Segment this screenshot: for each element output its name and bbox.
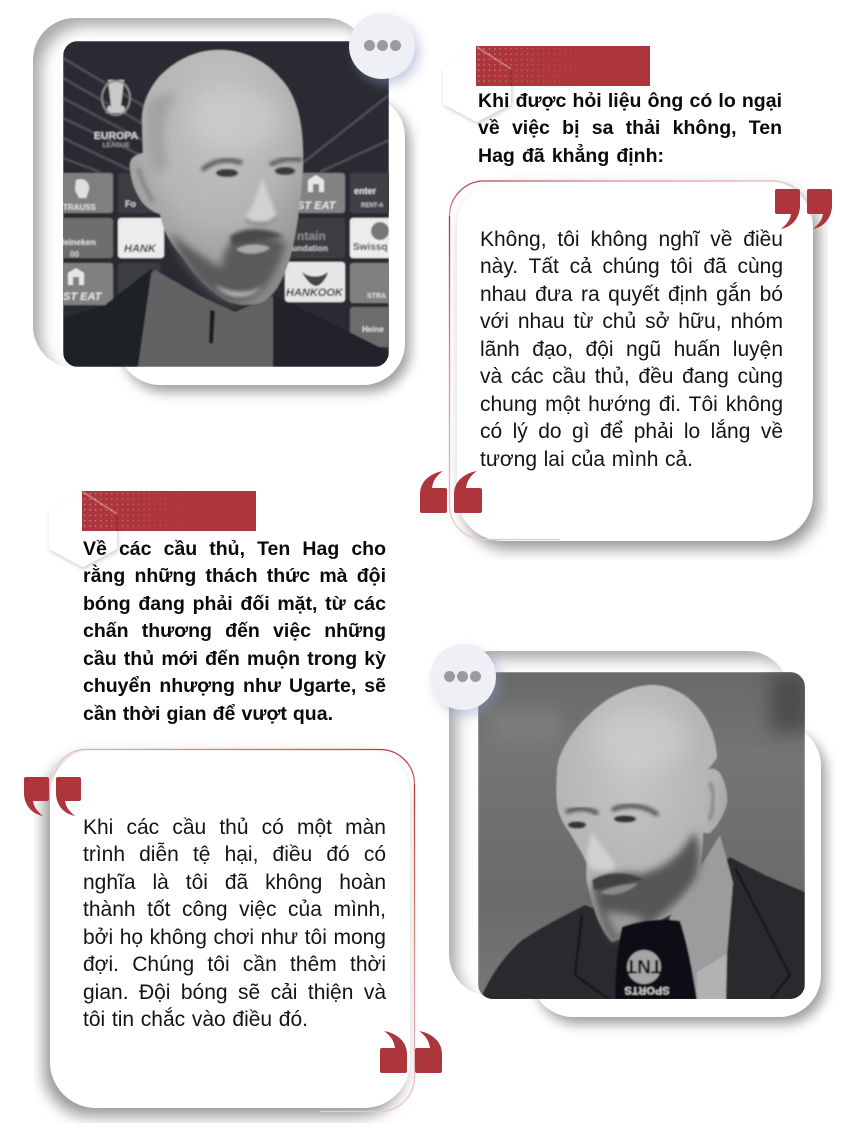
quote card outline right — [448, 180, 811, 540]
icon: hexagon accent left — [48, 514, 120, 570]
jacket — [480, 857, 805, 1000]
quote text: Ten Hag takes responsibility: Khi các cầu thủ có một màn — [83, 816, 386, 839]
photo: Ten Hag at Europa League interview — [63, 41, 389, 367]
white front panel — [531, 724, 821, 1017]
heading: question about being sacked: Hag đã khẳng định: — [478, 145, 664, 167]
icon: quote mark top left — [24, 777, 81, 816]
boards — [55, 173, 113, 213]
icon: three dots badge top — [349, 13, 415, 79]
photo: Ten Hag with TNT Sports microphone — [478, 672, 805, 999]
heading: players and challenges: rằng những thách thức mà đội — [83, 565, 386, 587]
forehead highlight — [224, 98, 274, 142]
lapel — [735, 868, 790, 1000]
heading: players and challenges: cầu thủ mới đến muộn trong kỳ — [83, 648, 386, 670]
white front panel — [118, 95, 405, 385]
top of head highlight — [609, 719, 676, 755]
icon: hexagon accent top — [442, 70, 514, 126]
moustache — [230, 229, 284, 246]
ear inner — [709, 782, 714, 820]
quote text: Ten Hag takes responsibility: trình diễn tệ hại, điều đó có — [83, 843, 386, 866]
eyes — [568, 822, 586, 828]
heading: players and challenges — [83, 538, 386, 725]
sweater — [135, 270, 283, 367]
photo: Ten Hag at Europa League interview: RENT-A — [361, 203, 384, 209]
nose — [246, 178, 276, 222]
heading: players and challenges: bóng đang phải đối mặt, từ các — [83, 593, 386, 615]
mouth — [236, 244, 270, 254]
icon: three dots badge bottom — [430, 644, 496, 710]
photo: Ten Hag at Europa League interview: STRA — [367, 293, 386, 300]
photo: Ten Hag at Europa League interview: Swissq — [353, 242, 387, 253]
quote text: Ten Hag takes responsibility: đợi. Chúng tôi cần thêm thời — [83, 953, 386, 976]
photo: Ten Hag at Europa League interview: 00 — [70, 250, 79, 259]
head — [130, 50, 303, 305]
quote text: Ten Hag not worried: và các cầu thủ, đều đang cùng — [480, 365, 783, 388]
panel: photo card top left — [33, 18, 418, 400]
panel: quote card left — [34, 747, 414, 1123]
photo: Ten Hag at Europa League interview: HANK — [124, 243, 157, 255]
brows — [202, 160, 242, 170]
heading: question about being sacked: Khi được hỏi liệu ông có lo ngại — [478, 90, 782, 112]
photo: Ten Hag at Europa League interview: Heine — [362, 325, 384, 334]
grey back panel — [449, 651, 789, 996]
quote text: Ten Hag takes responsibility — [83, 816, 386, 1031]
photo: Ten Hag at Europa League interview: ST EAT — [297, 200, 337, 212]
photo: Ten Hag at Europa League interview: Heineken — [58, 237, 96, 247]
quote text: Ten Hag takes responsibility: gian. Đội bóng sẽ cải thiện và — [83, 981, 386, 1004]
jacket — [63, 268, 152, 367]
side of head shade — [146, 92, 175, 172]
eyes — [216, 169, 238, 177]
quote text: Ten Hag not worried — [480, 228, 783, 470]
mouth — [600, 883, 638, 895]
panel: quote card right — [453, 179, 828, 559]
photo: Ten Hag at Europa League interview: ntain — [297, 229, 326, 243]
red title bar top — [476, 46, 650, 86]
trophy — [106, 80, 126, 113]
photo: Ten Hag at Europa League interview: EUROPA — [94, 130, 138, 142]
beard — [592, 832, 700, 942]
photo: Ten Hag at Europa League interview: Fo — [125, 199, 136, 209]
white card with shadow — [50, 749, 410, 1108]
quote text: Ten Hag not worried: lãnh đạo, đội ngũ huấn luyện — [480, 338, 783, 361]
microphone — [615, 920, 697, 1000]
panel: photo card bottom right — [449, 651, 834, 1032]
quote text: Ten Hag takes responsibility: bởi họ không chơi như tôi mong — [83, 926, 386, 949]
photo: Ten Hag at Europa League interview: undation — [292, 243, 328, 253]
brows — [566, 809, 598, 814]
turtleneck — [668, 836, 734, 998]
nose — [587, 832, 616, 871]
quote text: Ten Hag not worried: với nhau từ chủ sở hữu, nhóm — [480, 310, 783, 333]
icon: closing quote mark top right — [775, 189, 832, 229]
head — [556, 685, 727, 942]
moustache — [592, 873, 644, 890]
heading: question about being sacked: về việc bị sa thải không, Ten — [478, 117, 782, 139]
quote text: Ten Hag not worried: có lý do gì để phải lo lắng về — [480, 420, 783, 443]
photo: Ten Hag at Europa League interview: TRAUSS — [63, 203, 97, 212]
heading: players and challenges: cần thời gian để vượt qua. — [83, 703, 333, 725]
red title bar left — [82, 491, 256, 531]
photo: Ten Hag at Europa League interview: HANKOOK — [286, 287, 344, 299]
heading: players and challenges: chấn thương đến việc những — [83, 620, 386, 642]
photo: Ten Hag at Europa League interview: ST EAT — [63, 291, 103, 303]
heading: players and challenges: chuyển nhượng như Ugarte, sẽ — [83, 675, 386, 697]
heading: question about being sacked — [478, 90, 782, 167]
quote text: Ten Hag takes responsibility: thành tốt công việc của mình, — [83, 898, 386, 921]
photo: Ten Hag with TNT Sports microphone: TNT — [625, 955, 662, 976]
quote text: Ten Hag not worried: tương lai của mình cả. — [480, 448, 693, 470]
quote text: Ten Hag not worried: nhau đưa ra quyết định gắn bó — [480, 283, 783, 306]
icon: opening quote mark bottom left of right card — [420, 471, 482, 513]
quote text: Ten Hag takes responsibility: nghĩa là tôi đã không hoàn — [83, 871, 386, 894]
heading: players and challenges: Về các cầu thủ, Ten Hag cho — [83, 538, 386, 560]
photo: Ten Hag at Europa League interview: enter — [354, 186, 377, 196]
photo: Ten Hag at Europa League interview: LEAGUE — [102, 142, 130, 149]
white card with shadow — [457, 181, 813, 541]
grey back panel — [33, 18, 368, 368]
quote text: Ten Hag not worried: chung một hướng đi. Tôi không — [480, 393, 783, 416]
zip — [209, 310, 215, 344]
ear inner — [138, 168, 154, 202]
quote text: Ten Hag takes responsibility: tôi tin chắc vào điều đó. — [83, 1008, 308, 1031]
beard — [170, 232, 286, 303]
quote text: Ten Hag not worried: này. Tất cả chúng tôi đã cùng — [480, 255, 783, 278]
quote text: Ten Hag not worried: Không, tôi không nghĩ về điều — [480, 228, 783, 251]
photo: Ten Hag with TNT Sports microphone: SPORTS — [624, 984, 670, 996]
